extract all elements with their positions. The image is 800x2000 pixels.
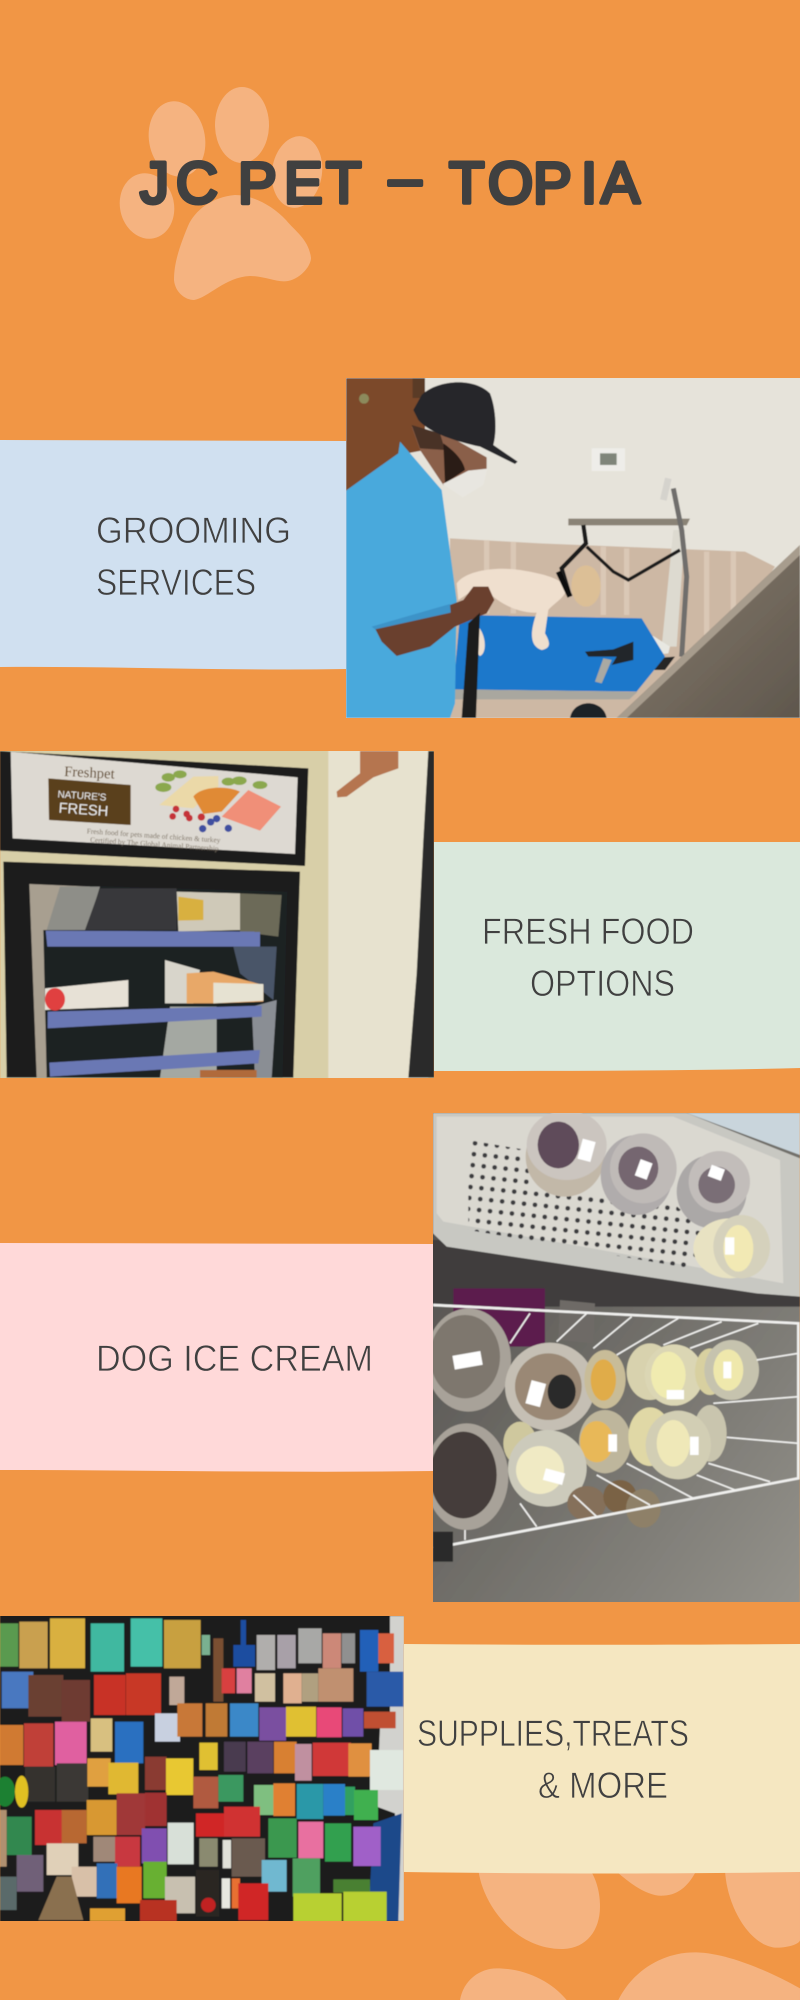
photo: Freshpet refrigerator bbox=[0, 751, 434, 1078]
heading: fresh food options: FRESH FOOD bbox=[482, 911, 694, 952]
photo: freezer of dog ice cream cups bbox=[433, 1113, 800, 1602]
title: JC PET – TOPIA bbox=[140, 146, 640, 216]
icon: paw print behind title bbox=[114, 87, 327, 300]
photo: Freshpet refrigerator: Freshpet bbox=[64, 764, 115, 783]
photo: wall of pet treats and supplies bbox=[0, 1616, 404, 1921]
heading: grooming services: GROOMING bbox=[96, 510, 291, 551]
heading: fresh food options: OPTIONS bbox=[530, 963, 675, 1004]
panel: supplies, treats and more bbox=[404, 1644, 800, 1874]
heading: grooming services: SERVICES bbox=[96, 562, 256, 603]
heading: dog ice cream: DOG ICE CREAM bbox=[96, 1338, 373, 1379]
photo: Freshpet refrigerator: Certified by The Global Animal Partnership bbox=[90, 835, 219, 853]
photo: groomer with dog on blue table bbox=[346, 378, 800, 718]
photo: Freshpet refrigerator: NATURE'S bbox=[57, 789, 107, 804]
heading: supplies, treats and more: SUPPLIES,TREATS bbox=[417, 1713, 689, 1754]
decorative paw shapes at bottom bbox=[460, 1870, 800, 2000]
heading: supplies, treats and more: & MORE bbox=[538, 1765, 668, 1806]
photo: Freshpet refrigerator: FRESH bbox=[58, 801, 109, 820]
panel: dog ice cream bbox=[0, 1243, 433, 1472]
panel: grooming services bbox=[0, 440, 346, 669]
panel: fresh food options bbox=[434, 842, 800, 1071]
photo: Freshpet refrigerator: Fresh food for pets made of chicken & turkey bbox=[87, 826, 221, 845]
